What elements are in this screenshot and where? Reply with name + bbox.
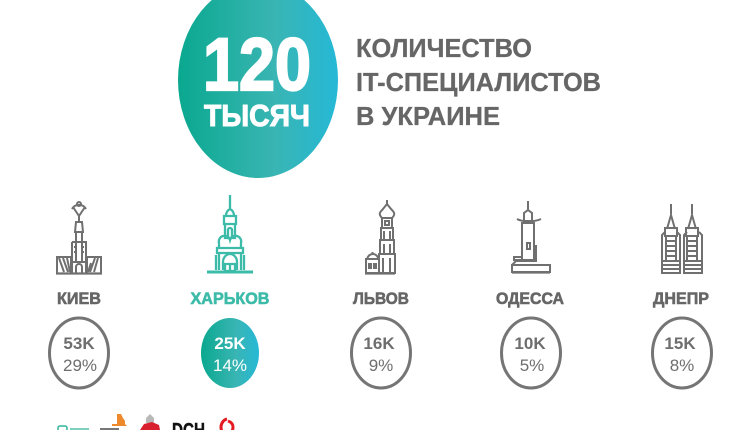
stat: Lviv: 16K [363,334,395,353]
stat: Kyiv: 29% [63,356,97,375]
city labels: ЛЬВОВ [353,289,409,308]
icon: Kyiv monument [56,202,102,274]
stat: Odessa: 10K [514,334,546,353]
main badge: 120 тысяч [178,0,338,178]
main badge: 120 тысяч: 120 [203,23,311,106]
stat: Kharkiv: 25K [214,334,246,353]
city labels: КИЕВ [57,289,101,308]
city labels: ОДЕССА [496,289,564,308]
stat: Lviv [352,318,410,388]
stat: Lviv: 9% [369,356,393,375]
stat: Kharkiv [201,318,259,388]
partner logos, cropped at page bottom [58,414,233,430]
icon: Lviv bell tower [365,200,395,274]
icon: Dnipro towers [662,204,702,273]
title: IT-СПЕЦИАЛИСТОВ [356,67,601,97]
stat: Kharkiv: 14% [213,356,247,375]
icon: Odessa lighthouse [512,201,550,272]
city labels: ДНЕПР [653,289,709,308]
title [356,33,601,131]
city labels [57,289,709,308]
title: КОЛИЧЕСТВО [356,33,532,63]
stat: Dnipro: 15K [664,334,696,353]
stat: Odessa [502,318,560,388]
main badge: 120 тысяч: ТЫСЯЧ [204,98,310,133]
title: В УКРАИНЕ [356,101,500,131]
stat: Dnipro [652,318,712,388]
stat: Odessa: 5% [520,356,544,375]
stat: Dnipro: 8% [670,356,694,375]
stat: Kyiv: 53K [63,334,95,353]
icon: Kharkiv tower [207,195,253,272]
city labels: ХАРЬКОВ [190,289,270,308]
stat: Kyiv [50,318,108,388]
